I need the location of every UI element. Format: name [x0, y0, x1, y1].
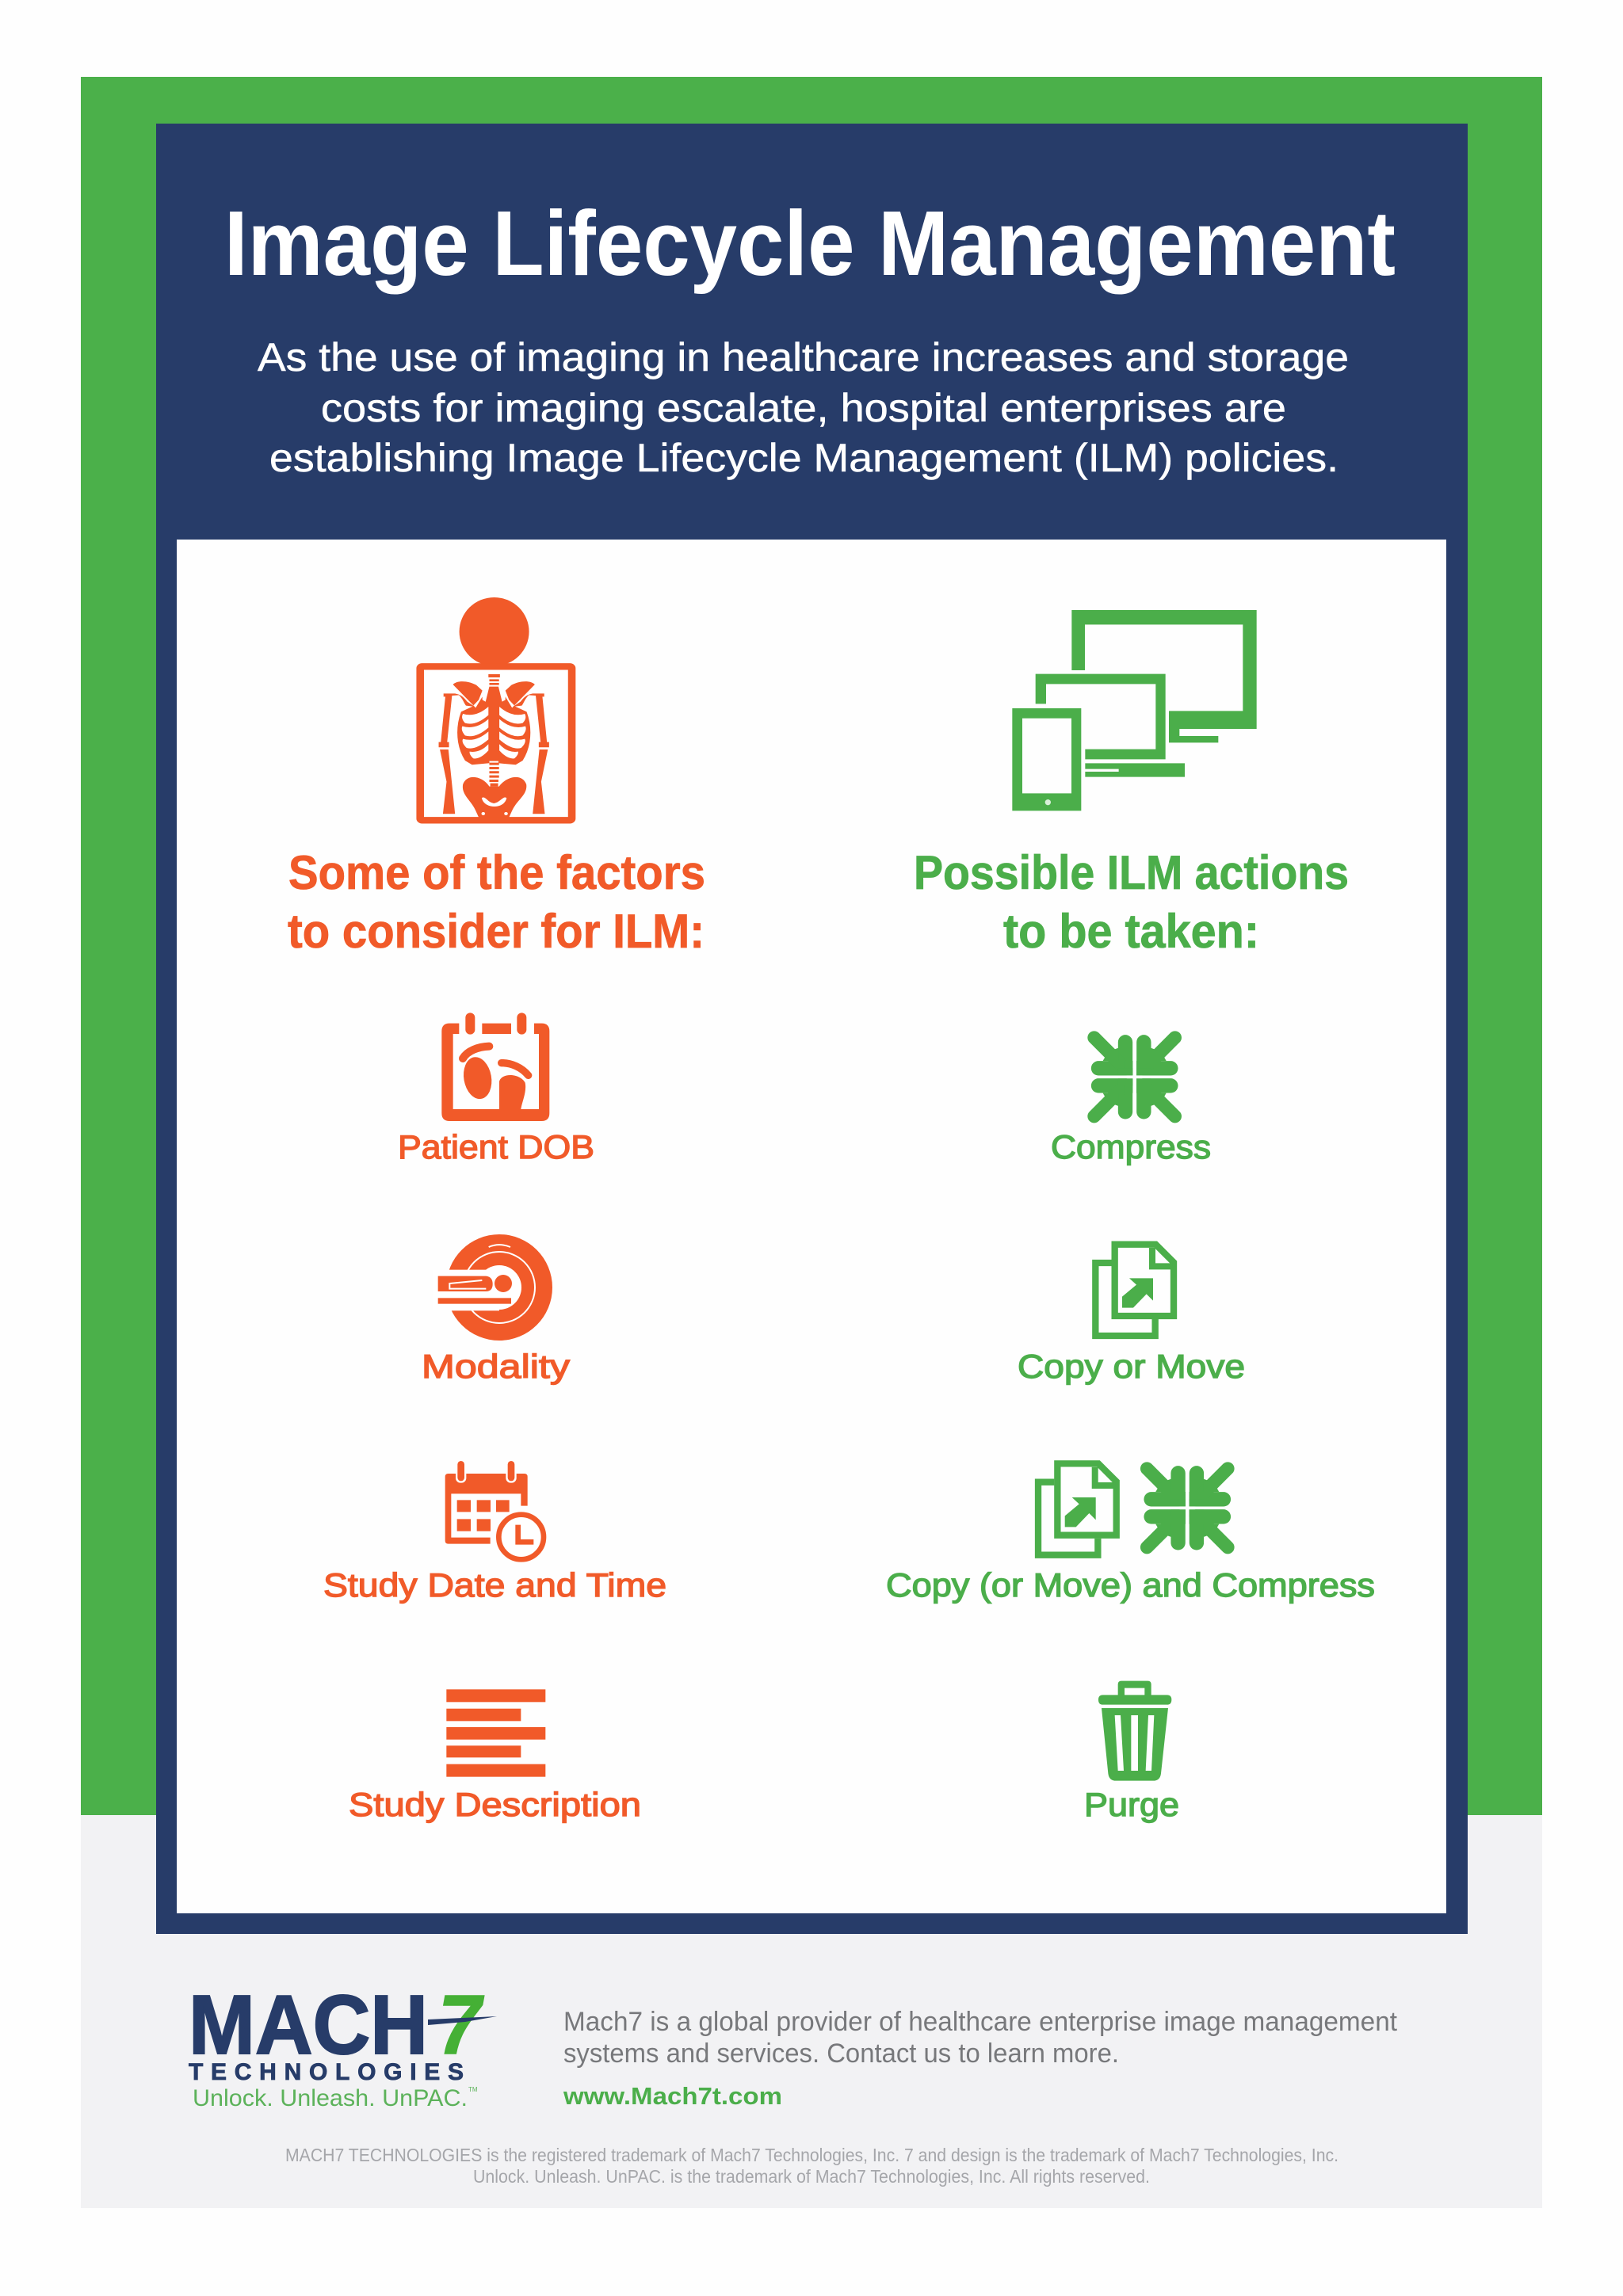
intro paragraph: establishing Image Lifecycle Management (ILM) policies.: [269, 436, 1338, 480]
heading: factors: to consider for ILM:: [288, 905, 705, 958]
trademark fine print: Unlock. Unleash. UnPAC. is the trademark of Mach7 Technologies, Inc. All rights reserved.: [473, 2166, 1150, 2187]
heading: actions: [914, 846, 1349, 958]
logo: Mach7 Technologies: TECHNOLOGIES: [189, 2059, 464, 2085]
panel: factors to consider: [288, 597, 705, 1823]
grey footer band: [81, 1815, 1542, 2208]
logo: Mach7 Technologies: TM: [468, 2086, 478, 2093]
icon: copy documents small: [1038, 1463, 1117, 1555]
label: Modality: [422, 1348, 570, 1385]
company description: systems and services. Contact us to learn more.: [563, 2039, 1119, 2069]
icon: calendar and clock: [445, 1460, 547, 1562]
icon: trash can: [1098, 1681, 1171, 1781]
icon: MRI scanner: [433, 1234, 552, 1341]
label: Compress: [1051, 1128, 1211, 1165]
logo: Mach7 Technologies: Unlock. Unleash. UnPAC.: [193, 2085, 468, 2111]
action: copy and compress: [886, 1463, 1375, 1604]
icon: copy documents: [1095, 1245, 1174, 1336]
company description: Mach7 is a global provider of healthcare enterprise image management: [563, 2007, 1398, 2037]
label: Copy or Move: [1018, 1348, 1245, 1385]
intro paragraph: [258, 335, 1349, 480]
white content panel: [177, 540, 1446, 1913]
intro paragraph: costs for imaging escalate, hospital enterprises are: [321, 386, 1286, 430]
factor: study date and time: [323, 1460, 666, 1604]
heading: factors: [288, 846, 705, 958]
heading: actions: Possible ILM actions: [914, 846, 1349, 899]
label: Patient DOB: [398, 1128, 594, 1165]
trademark fine print: MACH7 TECHNOLOGIES is the registered trademark of Mach7 Technologies, Inc. 7 and design is the trademark of Mach7 Technologies, Inc.: [285, 2145, 1338, 2165]
navy frame: [156, 124, 1468, 1934]
website link: www.Mach7t.com: [563, 2082, 782, 2110]
action: compress: [1051, 1038, 1211, 1165]
label: Study Description: [349, 1786, 641, 1823]
icon: text lines: [446, 1689, 545, 1777]
label: Copy (or Move) and Compress: [886, 1566, 1375, 1604]
heading: actions: to be taken:: [1003, 905, 1259, 958]
panel: possible actions: [886, 610, 1375, 1823]
icon: compress arrows small: [1147, 1469, 1228, 1547]
action: purge: [1084, 1681, 1179, 1823]
label: Study Date and Time: [323, 1566, 666, 1604]
action: copy or move: [1018, 1245, 1245, 1385]
factor: patient DOB: [398, 1013, 594, 1165]
logo: Mach7 Technologies: 7: [438, 1978, 485, 2072]
icon: x-ray skeleton: [420, 597, 572, 820]
trademark fine print: [285, 2145, 1338, 2187]
factor: modality: [422, 1234, 570, 1385]
icon: screens and devices: [1012, 610, 1257, 810]
intro paragraph: As the use of imaging in healthcare increases and storage: [258, 335, 1349, 379]
factor: study description: [349, 1689, 641, 1823]
logo: Mach7 Technologies: [189, 1978, 497, 2111]
company description: [563, 2007, 1398, 2069]
heading: factors: Some of the factors: [288, 846, 705, 899]
label: Purge: [1084, 1786, 1179, 1823]
logo: Mach7 Technologies: MACH: [189, 1978, 428, 2072]
green backdrop band: [81, 77, 1542, 1815]
icon: baby feet calendar: [441, 1013, 549, 1121]
icon: compress arrows: [1094, 1038, 1175, 1116]
title: Image Lifecycle Management: [224, 192, 1396, 295]
